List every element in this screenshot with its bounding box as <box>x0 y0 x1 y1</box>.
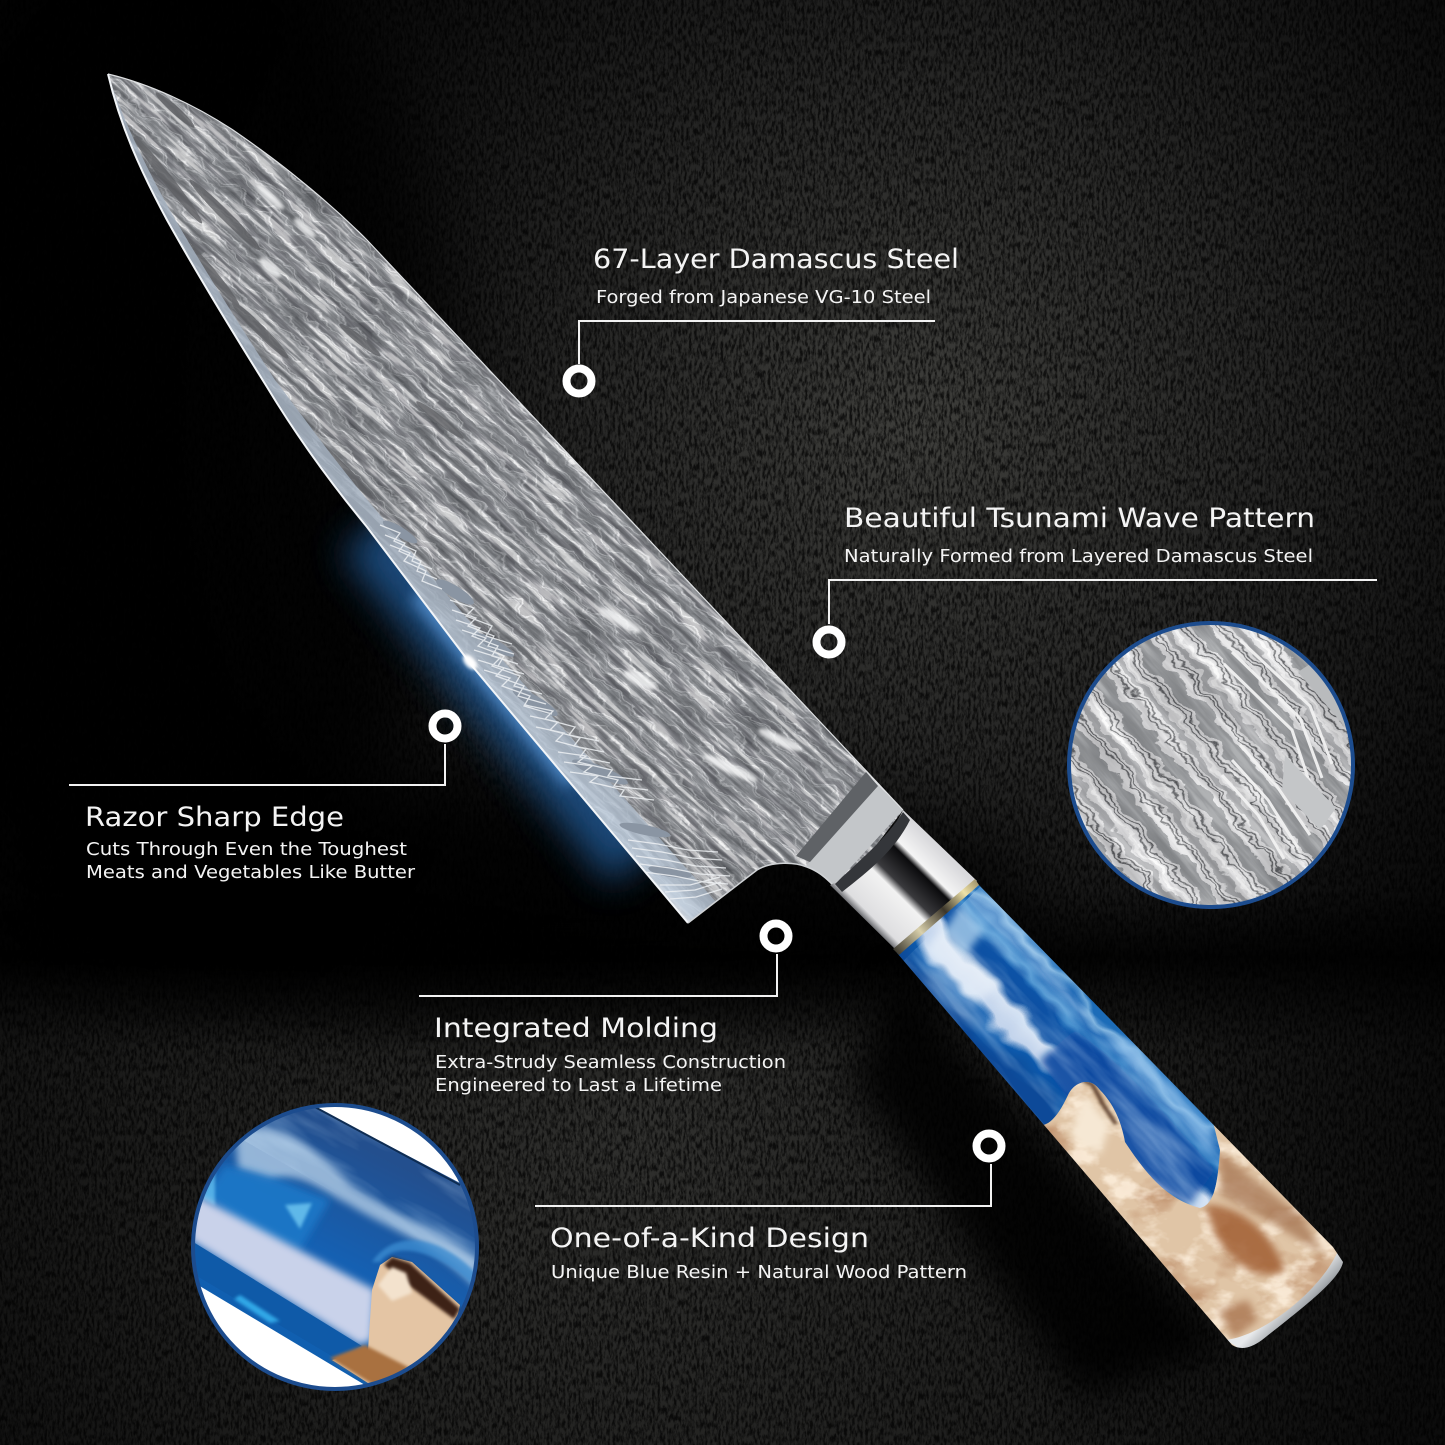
callout: Razor Sharp Edge: Cuts Through Even the Toughest <box>86 839 407 860</box>
callout: Beautiful Tsunami Wave Pattern: Naturally Formed from Layered Damascus Steel <box>844 546 1313 567</box>
blue glow behind cutting edge <box>372 528 640 860</box>
burl wood <box>332 1257 460 1392</box>
callout: Integrated Molding: Extra-Strudy Seamless Construction <box>435 1052 786 1073</box>
bolster: polished steel <box>830 810 977 951</box>
edge sparkle <box>460 652 480 672</box>
chevron wave clusters near the edge <box>380 525 730 899</box>
chevron waves at the right <box>1222 640 1332 859</box>
callout: Razor Sharp Edge: Meats and Vegetables Like Butter <box>86 862 416 883</box>
burl wood section <box>1044 1082 1338 1348</box>
white flecks <box>254 182 804 785</box>
callout: 67-Layer Damascus Steel: 67-Layer Damascus Steel <box>593 244 959 275</box>
blade: damascus steel <box>109 75 903 922</box>
light steel bevel along the cutting edge <box>108 74 716 923</box>
callout: Razor Sharp Edge <box>69 714 458 883</box>
callout: Integrated Molding: Engineered to Last a Lifetime <box>435 1075 722 1096</box>
gray lozenges beside the bevel <box>380 517 693 881</box>
callout: One-of-a-Kind Design: Unique Blue Resin + Natural Wood Pattern <box>551 1262 967 1283</box>
callout: One-of-a-Kind Design <box>535 1134 1002 1283</box>
spine and edge highlights <box>108 74 903 810</box>
callout: 67-Layer Damascus Steel <box>566 244 959 394</box>
collar ring: brass and steel <box>893 879 979 955</box>
callout: Integrated Molding: Integrated Molding <box>434 1013 718 1044</box>
lower blue strip <box>190 1240 362 1358</box>
white background corners <box>318 1107 460 1183</box>
callout: Integrated Molding <box>419 924 788 1096</box>
callout: Razor Sharp Edge: Razor Sharp Edge <box>85 802 344 833</box>
detail circle: wave pattern <box>1067 621 1355 909</box>
callout: One-of-a-Kind Design: One-of-a-Kind Design <box>550 1223 869 1254</box>
knife <box>107 73 1343 1348</box>
callout: Beautiful Tsunami Wave Pattern <box>816 503 1377 654</box>
upper light swirl <box>235 1127 478 1290</box>
handle: blue resin and burl wood <box>897 884 1343 1348</box>
butt cap <box>1226 1253 1346 1352</box>
pearl white band <box>190 1192 375 1345</box>
resin swirls <box>904 886 1220 1206</box>
callout: Beautiful Tsunami Wave Pattern: Beautiful Tsunami Wave Pattern <box>844 503 1315 534</box>
heel plate band <box>806 782 903 888</box>
callout: 67-Layer Damascus Steel: Forged from Japanese VG-10 Steel <box>596 287 931 308</box>
dark lozenges near the tip <box>130 90 466 547</box>
detail circle: resin and wood <box>191 1103 479 1391</box>
